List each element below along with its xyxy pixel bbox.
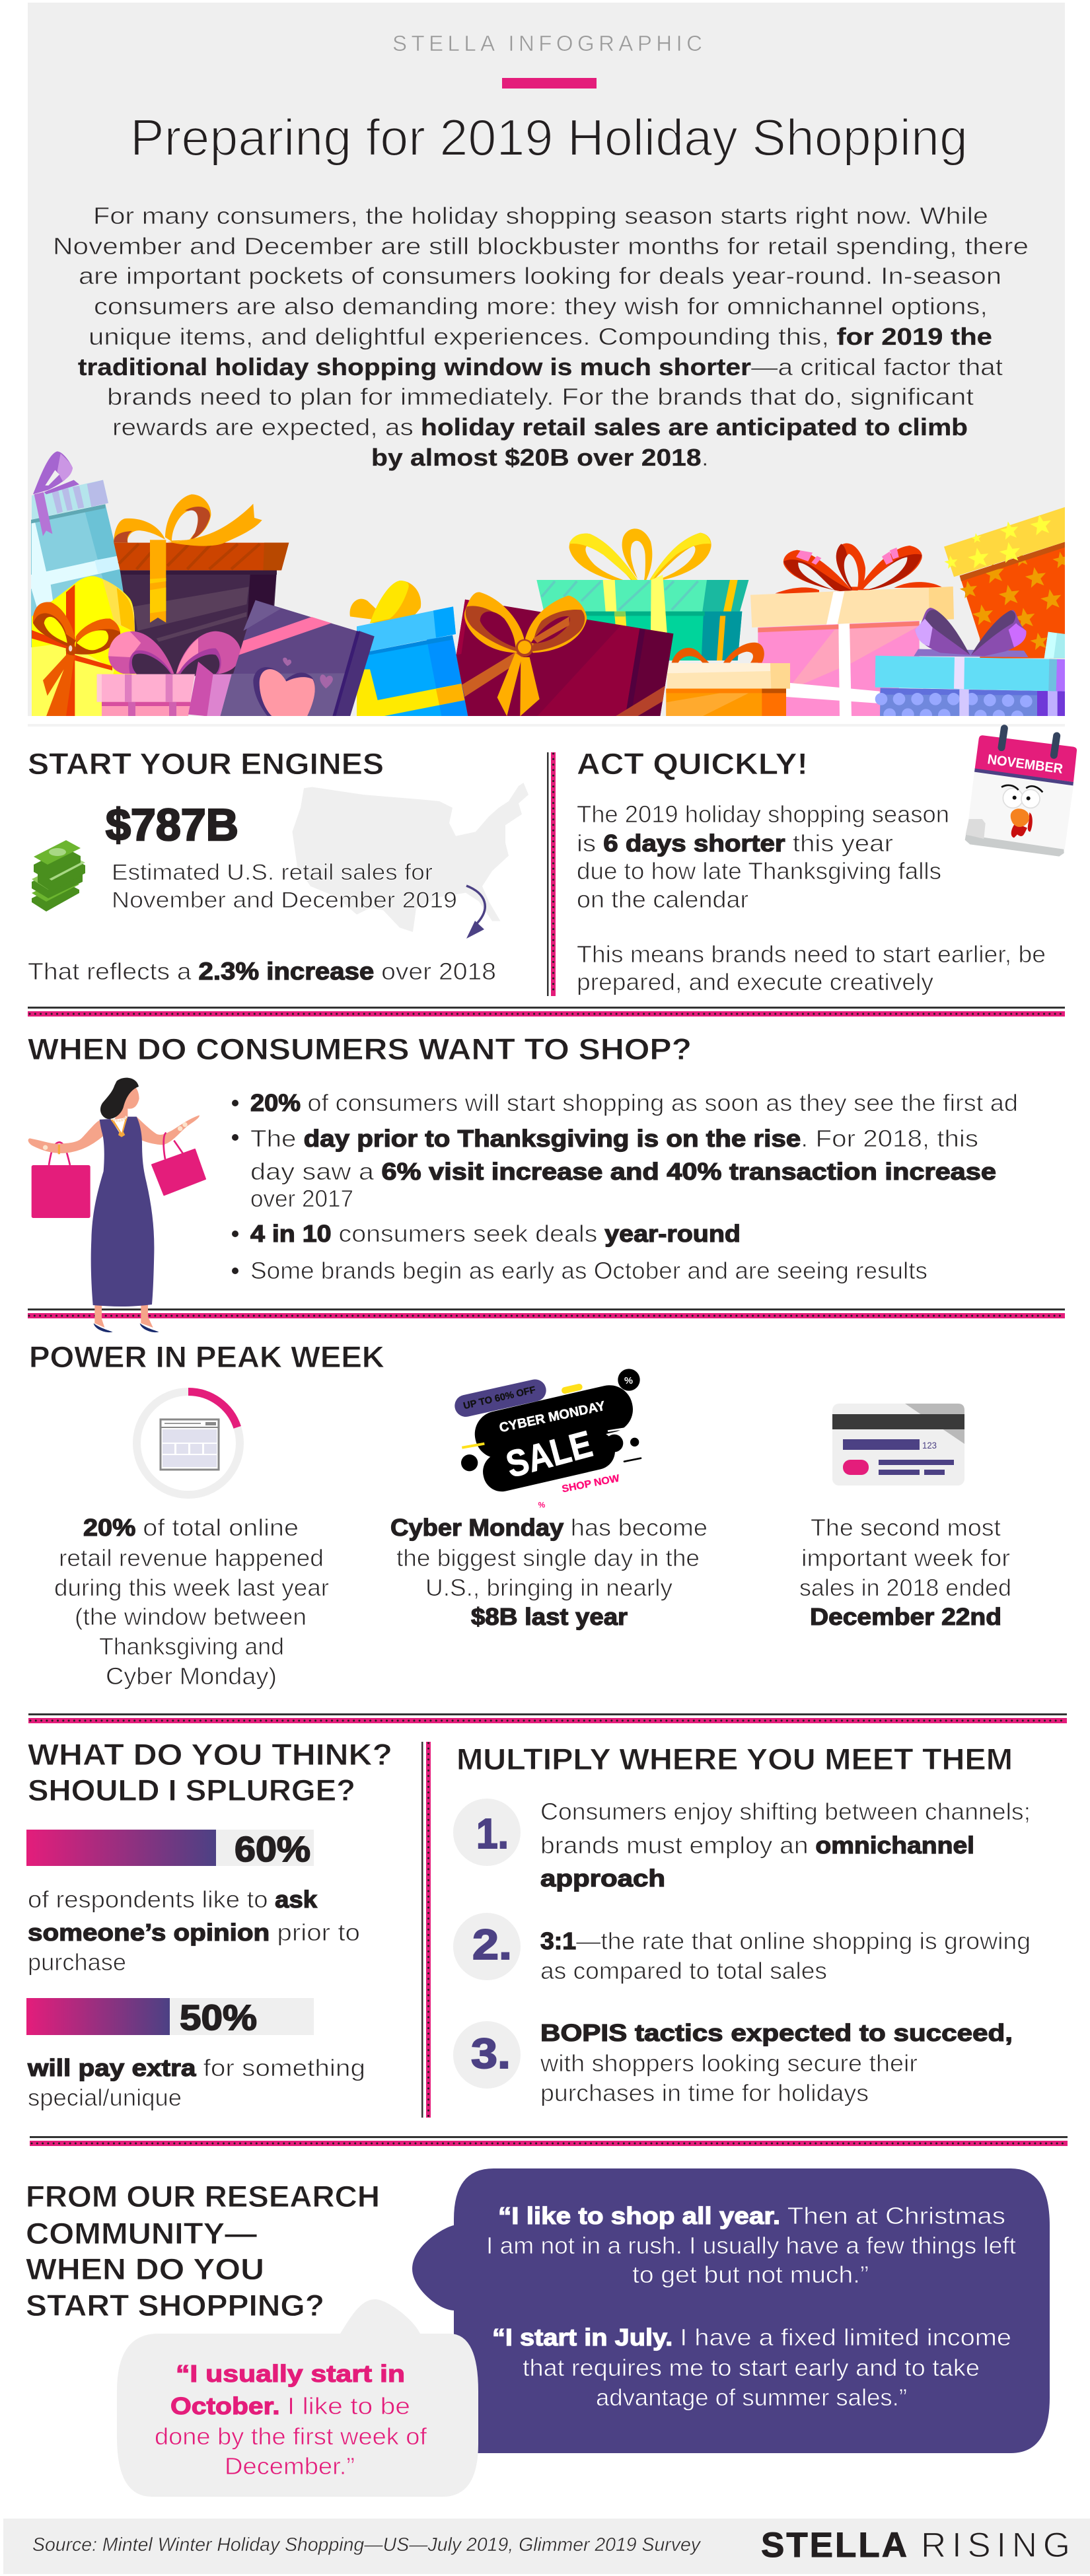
bullet list: 20% of consumers will start shopping as soon as they see the first ad [250, 1089, 1018, 1116]
text: ask someone's opinion: of respondents like to ask [28, 1886, 318, 1913]
gift: pink box with red bow [750, 543, 954, 716]
speech bubble: gray quote: “I usually start in [176, 2360, 405, 2387]
gift: cyan and periwinkle box with purple bow [875, 608, 1066, 723]
intro paragraph: traditional holiday shopping window is much shorter —a critical factor that [78, 353, 1003, 380]
text: 20% of revenue [54, 1514, 329, 1690]
caption [112, 860, 457, 913]
heading: POWER IN PEAK WEEK [29, 1340, 385, 1374]
gift: dark plum box with orange lid [114, 494, 289, 676]
section rule [28, 1007, 1065, 1017]
text: 20% of revenue: (the window between [75, 1603, 307, 1630]
item 3: BOPIS tactics expected to succeed, [540, 2019, 1013, 2046]
text: 20% of revenue: 20% of total online [83, 1514, 299, 1541]
gift: maroon box with gold bow [456, 592, 673, 716]
intro paragraph: For many consumers, the holiday shopping season starts right now. While [93, 202, 988, 229]
heading: START SHOPPING? [26, 2289, 324, 2322]
text block: prepared, and execute creatively [577, 968, 933, 995]
title: Preparing for 2019 Holiday Shopping [130, 108, 968, 166]
bullet list: Some brands begin as early as October and are seeing results [250, 1257, 927, 1284]
heading: FROM OUR RESEARCH [26, 2180, 380, 2213]
text: second most important week: sales in 2018 ended [799, 1574, 1011, 1601]
icon: cyber monday sale badge: SALE [502, 1423, 597, 1486]
text: ask someone's opinion: someone’s opinion prior to [28, 1919, 360, 1946]
bullet list: over 2017 [250, 1185, 353, 1212]
logo: Stella Rising: RISING [921, 2526, 1070, 2565]
source note: Source: Mintel Winter Holiday Shopping—US—July 2019, Glimmer 2019 Survey [32, 2534, 701, 2556]
eyebrow: Stella Infographic: STELLA INFOGRAPHIC [392, 31, 702, 55]
bar: 60 percent [26, 1830, 314, 1869]
bar: 50 percent [26, 1998, 314, 2038]
gift: orange box with stars [943, 507, 1071, 659]
intro paragraph: are important pockets of consumers looking for deals year-round. In-season [79, 262, 1001, 289]
logo: Stella Rising [761, 2526, 1070, 2565]
text block: is 6 days shorter this year [577, 830, 893, 857]
panel: when do consumers want to shop [28, 1032, 1018, 1284]
text block: The 2019 holiday shopping season [577, 801, 949, 828]
icon: credit card: 123 [922, 1440, 937, 1450]
speech bubble: gray quote: December.” [225, 2452, 355, 2480]
text: will pay extra: will pay extra for something [27, 2054, 365, 2081]
text: cyber monday [390, 1514, 708, 1630]
gift: blue box with yellow ribbon [350, 581, 468, 719]
gift: yellow box with orange bow [32, 576, 137, 716]
vertical divider [547, 752, 556, 996]
heading: WHEN DO CONSUMERS WANT TO SHOP? [28, 1032, 692, 1066]
icon: cyber monday sale badge [461, 1369, 641, 1510]
icon: cyber monday sale badge: % [538, 1501, 546, 1510]
intro paragraph: by almost $20B over 2018 . [371, 444, 709, 471]
text: will pay extra: special/unique [28, 2084, 182, 2111]
speech bubble: purple quotes: “I start in July. I have a fixed limited income [492, 2324, 1011, 2351]
gift: purple box with heart [188, 600, 375, 716]
speech bubble: gray quote: October. I like to be [170, 2392, 410, 2419]
caption: November and December 2019 [112, 888, 457, 913]
caption: Estimated U.S. retail sales for [112, 860, 433, 885]
speech bubble: purple quotes [412, 2168, 1050, 2453]
heading: ACT QUICKLY! [577, 747, 808, 781]
text: 20% of revenue: retail revenue happened [59, 1544, 324, 1571]
icon: November calendar with turkey [965, 729, 1077, 857]
heading: COMMUNITY— [26, 2217, 257, 2250]
item 2: 2. [472, 1921, 512, 1968]
bullet list: The day prior to Thanksgiving is on the rise . For 2018, this [250, 1125, 978, 1152]
icon: cyber monday sale badge: SHOP NOW [561, 1473, 621, 1495]
text: second most important week: December 22nd [810, 1603, 1001, 1630]
speech bubble: purple quotes: that requires me to start early and to take [523, 2354, 980, 2381]
callout: 2.3% increase: That reflects a 2.3% increase over 2018 [28, 958, 496, 985]
intro paragraph: rewards are expected, as holiday retail sales are anticipated to climb [112, 413, 968, 441]
heading: START YOUR ENGINES [28, 747, 384, 781]
heading: MULTIPLY WHERE YOU MEET THEM [456, 1742, 1013, 1776]
panel: header [28, 3, 1065, 716]
heading: WHEN DO YOU [26, 2252, 264, 2286]
text block: on the calendar [577, 886, 748, 913]
text: second most important week: important week for [801, 1544, 1010, 1571]
text: 20% of revenue: during this week last year [54, 1574, 329, 1601]
icon: November calendar with turkey: NOVEMBER [986, 752, 1064, 777]
intro paragraph [53, 202, 1029, 471]
item 3: with shoppers looking secure their [540, 2050, 918, 2077]
intro paragraph: brands need to plan for immediately. For the brands that do, significant [107, 383, 974, 410]
illustration: pile of gift boxes [26, 451, 1071, 723]
item 1: 1. [476, 1810, 509, 1857]
item 3: purchases in time for holidays [540, 2079, 869, 2106]
pink accent bar [502, 78, 597, 89]
stat: $787B: $787B [106, 800, 238, 850]
divider line under header [28, 724, 1065, 727]
speech bubble: gray quote [117, 2299, 478, 2497]
panel: from our research community [26, 2168, 1050, 2497]
text: second most important week [799, 1514, 1011, 1630]
panel: act quickly [577, 729, 1077, 995]
item 1 [453, 1798, 1031, 1892]
panel: multiply where you meet them [453, 1742, 1031, 2106]
text: cyber monday: Cyber Monday has become [390, 1514, 708, 1541]
bullet list: day saw a 6% visit increase and 40% transaction increase [250, 1158, 996, 1185]
gift: small cream and orange box [666, 643, 790, 716]
icon: cyber monday sale badge: CYBER MONDAY [498, 1399, 606, 1435]
text: will pay extra [27, 2054, 365, 2111]
text: cyber monday: the biggest single day in the [396, 1544, 700, 1571]
item 1: brands must employ an omnichannel [540, 1832, 974, 1859]
intro paragraph: consumers are also demanding more: they wish for omnichannel options, [94, 293, 988, 320]
item 1: approach [540, 1865, 665, 1892]
intro paragraph: unique items, and delightful experiences. Compounding this, for 2019 the [89, 323, 992, 350]
text block [577, 801, 1046, 995]
item 3 [453, 2019, 1013, 2106]
text: ask someone's opinion [28, 1886, 360, 1976]
text: 20% of revenue: Cyber Monday) [106, 1663, 277, 1690]
bullet list [232, 1089, 1018, 1284]
speech bubble: purple quotes: I am not in a rush. I usually have a few things left [486, 2232, 1016, 2259]
item 3: 3. [471, 2030, 511, 2077]
text: second most important week: The second most [811, 1514, 1001, 1541]
speech bubble: gray quote: done by the first week of [155, 2423, 427, 2450]
map of the United States [292, 783, 528, 932]
bar: 50 percent: 50% [180, 1998, 257, 2038]
item 1: Consumers enjoy shifting between channels; [540, 1798, 1031, 1825]
heading [26, 2180, 380, 2322]
text: 20% of revenue: Thanksgiving and [99, 1633, 284, 1660]
panel: power in peak week [29, 1340, 1011, 1690]
gift: teal box with yellow bow [536, 528, 748, 661]
item 2: 3:1—the rate that online shopping is growing [540, 1927, 1031, 1954]
icon: donut 20 percent with browser window [137, 1392, 240, 1495]
icon: cyber monday sale badge: % [624, 1376, 633, 1386]
text: cyber monday: $8B last year [471, 1603, 628, 1630]
intro paragraph: November and December are still blockbuster months for retail spending, there [53, 233, 1029, 260]
bar: 60 percent: 60% [235, 1830, 310, 1869]
gift: pink box with magenta bow [97, 631, 241, 716]
heading: WHAT DO YOU THINK? [28, 1738, 392, 1771]
panel: what do you think [26, 1738, 392, 2111]
heading [28, 1738, 392, 1807]
speech bubble: purple quotes: advantage of summer sales.” [596, 2384, 907, 2411]
speech bubble: purple quotes: “I like to shop all year. Then at Christmas [498, 2202, 1005, 2229]
item 2: as compared to total sales [540, 1957, 827, 1984]
bullet list: 4 in 10 consumers seek deals year-round [250, 1220, 741, 1247]
vertical divider [421, 1742, 431, 2118]
section rule [28, 1308, 1065, 1318]
speech bubble: purple quotes: to get but not much.” [632, 2261, 869, 2288]
section rule [30, 2136, 1068, 2146]
gift: light blue box with purple ribbon [26, 451, 127, 647]
icon: stack of money [32, 840, 85, 912]
illustration: woman with shopping bags [28, 1078, 205, 1332]
heading: SHOULD I SPLURGE? [28, 1773, 355, 1807]
text block: This means brands need to start earlier, be [577, 941, 1046, 968]
text: cyber monday: U.S., bringing in nearly [425, 1574, 672, 1601]
section rule [28, 1713, 1067, 1723]
text block: due to how late Thanksgiving falls [577, 857, 941, 884]
item 2 [453, 1913, 1031, 1984]
icon: cyber monday sale badge: UP TO 60% OFF [462, 1385, 536, 1412]
arrow: curved down [466, 886, 485, 939]
text: ask someone's opinion: purchase [28, 1949, 126, 1976]
logo: Stella Rising: STELLA [761, 2526, 907, 2565]
icon: credit card [832, 1404, 964, 1485]
footer [3, 2519, 1090, 2574]
panel: start your engines [28, 747, 528, 985]
